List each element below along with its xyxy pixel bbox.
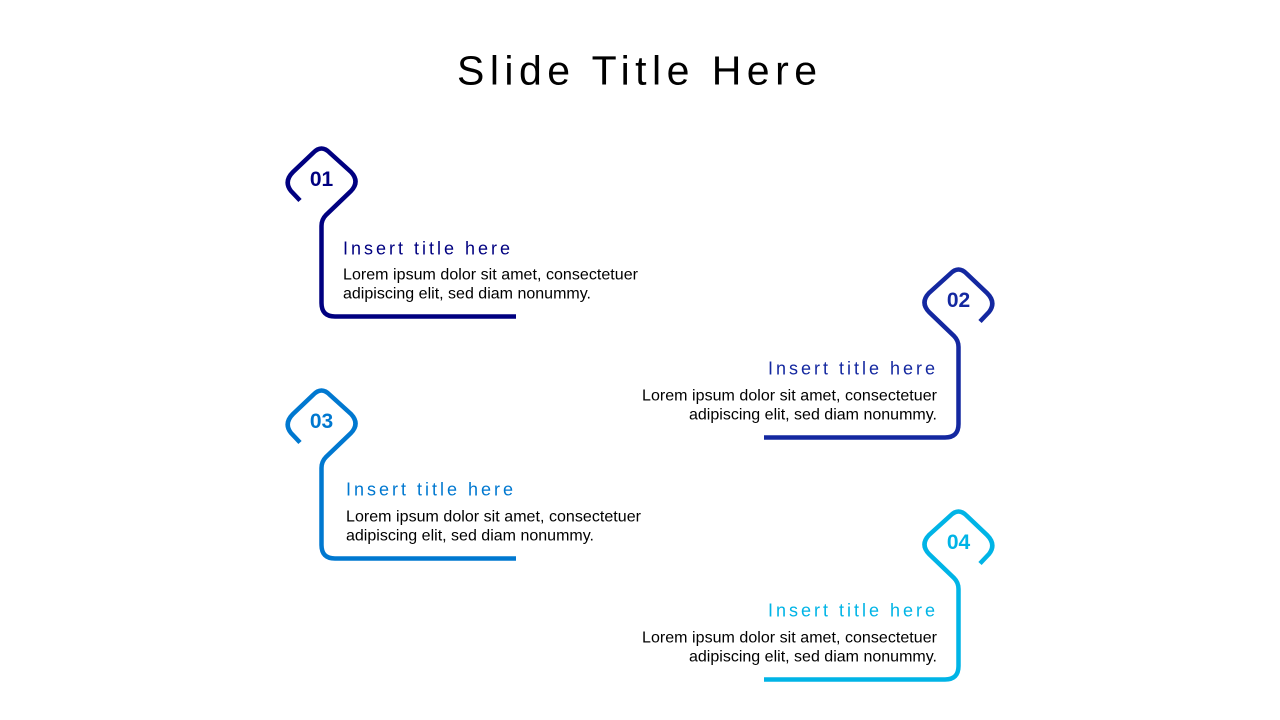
- body text 04: [642, 630, 938, 666]
- number 01: 01: [310, 168, 333, 191]
- body text 04: adipiscing elit, sed diam nonummy.: [689, 648, 937, 666]
- connector outline 04: [764, 512, 992, 680]
- panel: item 01: [288, 148, 639, 316]
- body text 02: Lorem ipsum dolor sit amet, consectetuer: [642, 388, 938, 404]
- title: Slide Title Here: [457, 48, 817, 94]
- item title 03: Insert title here: [346, 480, 513, 500]
- body text 03: adipiscing elit, sed diam nonummy.: [346, 528, 594, 544]
- connector outline 01: [288, 148, 516, 316]
- number 03: 03: [310, 410, 333, 433]
- number 04: 04: [947, 531, 970, 554]
- item title 01: Insert title here: [343, 238, 510, 258]
- panel: item 04: [642, 512, 992, 680]
- item title 02: Insert title here: [768, 358, 935, 378]
- connector outline 03: [288, 390, 516, 558]
- body text 03: Lorem ipsum dolor sit amet, consectetuer: [346, 508, 642, 526]
- body text 01: Lorem ipsum dolor sit amet, consectetuer: [343, 266, 639, 284]
- body text 04: Lorem ipsum dolor sit amet, consectetuer: [642, 630, 938, 646]
- body text 02: adipiscing elit, sed diam nonummy.: [689, 406, 937, 424]
- number 02: 02: [947, 289, 970, 312]
- body text 01: adipiscing elit, sed diam nonummy.: [343, 286, 591, 302]
- panel: item 02: [642, 270, 992, 438]
- body text 01: [343, 266, 639, 302]
- body text 02: [642, 388, 938, 424]
- connector outline 02: [764, 270, 992, 438]
- body text 03: [346, 508, 642, 544]
- item title 04: Insert title here: [768, 600, 935, 620]
- panel: item 03: [288, 390, 642, 558]
